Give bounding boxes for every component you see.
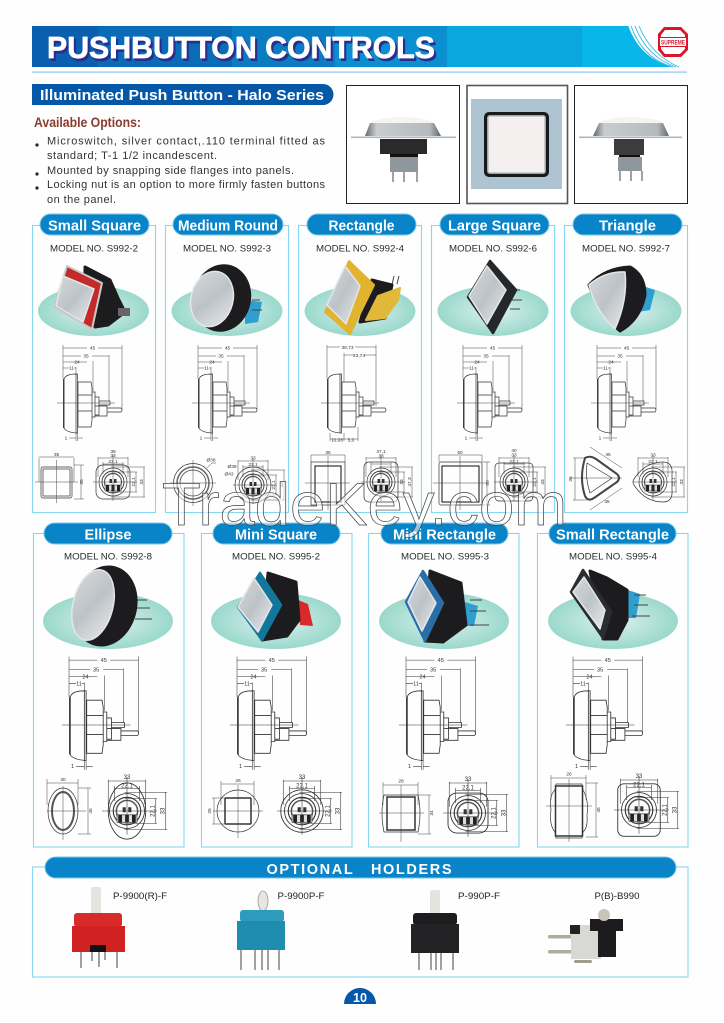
front view: 45 (605, 452, 611, 458)
panel: Triangle: MODEL NO. S992-7 (582, 244, 670, 254)
title: PUSHBUTTON CONTROLS (49, 32, 437, 68)
side drawing: 45 (438, 658, 444, 664)
rear view: 33 (465, 777, 472, 783)
side drawing: 24 (82, 674, 89, 680)
photo: button front view (467, 86, 568, 204)
side drawing: 35 (83, 354, 89, 360)
rear view: 22,1 (662, 804, 669, 816)
holder: red: P-9900(R)-F (113, 890, 167, 901)
available options text: Locking nut is an option to more firmly fasten buttons (47, 179, 326, 191)
side drawing (192, 345, 257, 442)
side drawing: 24 (586, 674, 593, 680)
side drawing: 1 (575, 764, 578, 770)
side drawing: 45 (101, 658, 107, 664)
product photo: small square button (38, 266, 149, 336)
rear view (224, 456, 285, 504)
rear view: 22,1 (648, 459, 658, 465)
section heading: Illuminated Push Button - Halo Series (40, 87, 324, 104)
side drawing: 45 (490, 346, 495, 352)
title: PUSHBUTTON CONTROLS (47, 30, 435, 65)
product photo: large square button (438, 261, 548, 336)
panel: Large Square: MODEL NO. S992-6 (449, 244, 537, 254)
photo: button side view (346, 86, 460, 204)
product photo: mini rectangle button (379, 571, 509, 649)
panel: Optional Holders (32, 857, 688, 977)
panel: Medium Round: Medium Round (178, 218, 278, 234)
rear view: 40 (511, 448, 517, 454)
rear view: 33 (679, 479, 685, 485)
rear view: 37,1 (376, 449, 386, 455)
rear view: 33 (160, 807, 167, 814)
front view: 30 (60, 777, 66, 783)
holder: black: P-990P-F (458, 890, 500, 901)
page number (344, 988, 376, 1005)
rear view (277, 775, 342, 835)
product photo: ellipse button (43, 558, 173, 654)
panel: Mini Rectangle: Mini Rectangle (393, 528, 496, 544)
side drawing: 1 (239, 764, 242, 770)
side drawing: 11 (244, 681, 250, 687)
rear view: 22,1 (509, 459, 519, 465)
front view: 26 (207, 808, 213, 814)
rear view: Ø39 (227, 464, 237, 470)
rear view (443, 777, 508, 837)
side drawing: 35 (93, 667, 99, 673)
front view: 50 (457, 450, 463, 456)
side drawing: 45 (624, 346, 629, 352)
rear view: 22,1 (271, 480, 277, 490)
side drawing: 10,08 (331, 438, 343, 444)
side drawing: 35 (430, 667, 436, 673)
rear view (102, 775, 167, 839)
side drawing: 1 (465, 436, 468, 442)
front view (35, 452, 85, 503)
panel: Small Rectangle: MODEL NO. S995-4 (569, 552, 658, 562)
side drawing: 23,74 (353, 353, 365, 359)
front view: 50 (485, 480, 491, 486)
side drawing: 35 (483, 354, 489, 360)
rear view: 33 (279, 482, 285, 488)
panel: Ellipse (34, 523, 184, 847)
side drawing: 45 (605, 658, 611, 664)
rear view: 33 (511, 452, 517, 458)
rear view (614, 774, 679, 836)
rear view: 33 (650, 452, 656, 458)
holder: switch type: P(B)-B990 (594, 890, 640, 901)
photo: button side view, no nut (574, 86, 688, 204)
panel: Mini Square: MODEL NO. S995-2 (232, 552, 320, 562)
side drawing (566, 657, 643, 770)
front view (546, 772, 602, 842)
side drawing: 1 (599, 436, 602, 442)
front view: 28 (398, 778, 404, 784)
side drawing: 1 (408, 764, 411, 770)
available options text: on the panel. (47, 194, 116, 206)
product photo: round button (172, 259, 282, 337)
panel: Large Square (432, 214, 554, 512)
panel: Small Rectangle (538, 523, 688, 847)
side drawing: 35 (597, 667, 603, 673)
rear view: 22,1 (248, 462, 258, 468)
rear view: 22,1 (131, 477, 137, 487)
side drawing: 24 (419, 674, 426, 680)
product photo: rectangle button (304, 261, 416, 336)
panel: Triangle (564, 214, 688, 512)
logo: Supreme: SUPREME (661, 40, 685, 46)
rear view: 22,1 (462, 785, 474, 791)
side drawing: 11 (580, 681, 586, 687)
side drawing (62, 657, 139, 770)
side drawing (457, 345, 522, 442)
rear view: 33 (636, 774, 643, 780)
front view (379, 778, 435, 842)
side drawing (399, 657, 476, 770)
rear view: 47,3 (407, 477, 413, 487)
panel: Small Square: Small Square (48, 218, 141, 234)
front view: 35 (54, 452, 59, 458)
side drawing: 45 (90, 346, 95, 352)
panel: Small Square: MODEL NO. S992-2 (50, 244, 138, 254)
product photo: triangle button (570, 267, 682, 336)
available options text: standard; T-1 1/2 incandescent. (47, 150, 217, 162)
available options text: Available Options: (34, 115, 141, 130)
front view: 45 (604, 499, 610, 505)
rear view: 33 (299, 775, 306, 781)
rear view: 22,1 (633, 782, 645, 788)
rear view: 22,1 (108, 459, 118, 465)
holders heading (45, 857, 676, 878)
rear view (633, 452, 685, 502)
side drawing: 11 (469, 366, 474, 372)
side drawing (57, 345, 122, 442)
rear view (494, 448, 546, 501)
rear view: 33 (110, 453, 116, 459)
rear view: 33 (139, 479, 145, 485)
rear view (361, 449, 413, 502)
front view: 45 (88, 808, 94, 814)
side drawing: 11 (413, 681, 419, 687)
holder: blue: P-9900P-F (278, 890, 325, 901)
side drawing: 1 (71, 764, 74, 770)
rear view: 38 (110, 449, 116, 455)
panel: Small Square (32, 214, 156, 512)
rear view: 22,1 (150, 805, 157, 817)
product photo: mini square button (211, 573, 341, 649)
side drawing (591, 345, 656, 442)
side drawing: 24 (250, 674, 257, 680)
available options text: Microswitch, silver contact,.110 terminal fitted as (47, 136, 326, 148)
holder: blue (237, 890, 325, 970)
side drawing: 45 (269, 658, 275, 664)
front view (170, 458, 216, 506)
panel: Mini Square (202, 523, 352, 847)
side drawing: 35 (218, 354, 224, 360)
page number: 10 (353, 991, 367, 1005)
side drawing: 11 (76, 681, 82, 687)
holder: switch type (548, 890, 640, 963)
front view: 34 (429, 810, 435, 816)
side drawing: 1 (65, 436, 68, 442)
panel: Mini Square: Mini Square (235, 528, 317, 544)
side drawing: 24 (474, 360, 480, 366)
panel: Mini Rectangle (368, 523, 519, 847)
front view: 35 (325, 450, 331, 456)
side drawing: 24 (608, 360, 614, 366)
front view (433, 450, 491, 510)
panel: Small Rectangle: Small Rectangle (556, 528, 669, 544)
panel: Rectangle: MODEL NO. S992-4 (316, 244, 405, 254)
side drawing: 24 (209, 360, 215, 366)
front view (305, 450, 350, 510)
logo: Supreme (658, 27, 688, 57)
front view (568, 447, 622, 510)
side drawing: 38,73 (341, 345, 354, 351)
watermark: TradeKey.com (162, 471, 567, 538)
rear view: 22,1 (671, 477, 677, 487)
rear view: 33 (335, 807, 342, 814)
side drawing: 1 (200, 436, 203, 442)
rear view: 33 (501, 809, 508, 816)
panel: Rectangle (298, 214, 422, 512)
rear view: Ø43 (224, 472, 234, 478)
side drawing: 24 (74, 360, 80, 366)
panel: Ellipse: MODEL NO. S992-8 (64, 552, 152, 562)
side drawing: 5,0 (348, 438, 355, 444)
available options text (34, 115, 326, 206)
panel: Rectangle: Rectangle (328, 218, 394, 234)
side drawing: 11 (204, 366, 209, 372)
header banner (32, 25, 690, 68)
panel: Large Square: Large Square (448, 218, 541, 234)
panel: Medium Round: MODEL NO. S992-3 (183, 244, 271, 254)
side drawing: 45 (225, 346, 230, 352)
rear view: 33 (672, 806, 679, 813)
front view: 35 (568, 476, 574, 482)
front view: 26 (235, 778, 241, 784)
rear view: 33 (378, 454, 384, 460)
holder: red (72, 887, 167, 968)
rear view: 22,1 (296, 783, 308, 789)
front view: Ø38 (206, 458, 216, 464)
panel: Mini Rectangle: MODEL NO. S995-3 (401, 552, 489, 562)
rear view: 22,1 (121, 783, 133, 789)
front view (47, 777, 94, 840)
panel: Medium Round (166, 214, 288, 512)
holders heading: OPTIONAL HOLDERS (266, 862, 452, 878)
side drawing (230, 657, 307, 770)
panel: Ellipse: Ellipse (84, 528, 132, 544)
side drawing: 35 (261, 667, 267, 673)
rear view: 22,1 (532, 477, 538, 487)
rear view (93, 449, 145, 501)
rear view: 33 (250, 456, 256, 462)
product photo: small rectangle button (548, 570, 678, 649)
side drawing: 35 (617, 354, 623, 360)
rear view: 33 (399, 479, 405, 485)
holder: black (411, 890, 500, 970)
front view (207, 778, 263, 838)
rear view: 33 (124, 775, 131, 781)
available options text: Mounted by snapping side flanges into panels. (47, 165, 294, 177)
panel: Triangle: Triangle (599, 218, 656, 234)
front view: 35 (79, 479, 85, 485)
front view: 26 (566, 772, 572, 778)
rear view: 33 (540, 479, 546, 485)
rear view: 22,1 (325, 805, 332, 817)
side drawing: 11 (603, 366, 608, 372)
side drawing: 11 (69, 366, 74, 372)
front view: 45 (596, 807, 602, 813)
side drawing (321, 345, 386, 444)
rear view: 22,1 (491, 807, 498, 819)
